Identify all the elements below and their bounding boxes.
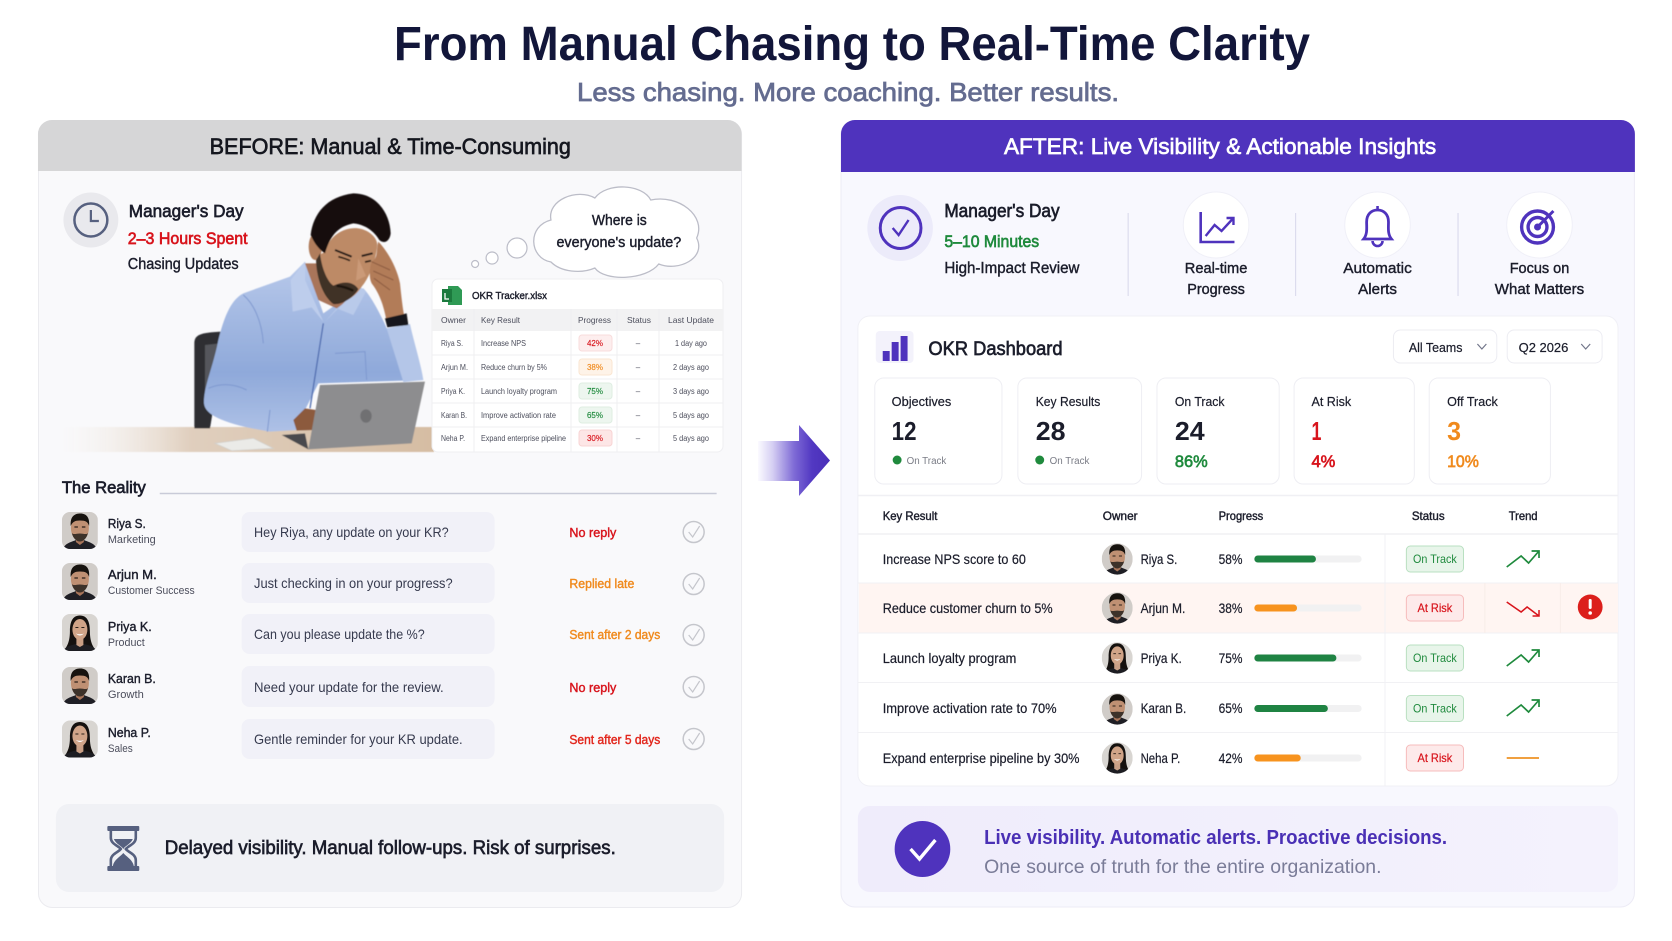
spreadsheet: okr tracker: 5 days ago: [673, 434, 709, 443]
spreadsheet: okr tracker: Karan B.: [441, 411, 467, 420]
kpi: on track: [1157, 378, 1279, 484]
row: pipeline: 42%: [1219, 751, 1242, 766]
manager's day before text: [128, 201, 248, 273]
spreadsheet: okr tracker: 2 days ago: [673, 363, 709, 372]
feature: focus on what matters: [1495, 192, 1584, 298]
kpi: off track: [1429, 378, 1550, 484]
feature: focus on what matters: What Matters: [1495, 281, 1584, 298]
feature: automatic alerts: [1343, 192, 1412, 298]
row: NPS: 58%: [1219, 552, 1242, 567]
spreadsheet: okr tracker: Arjun M.: [441, 363, 468, 372]
kpi: objectives: On Track: [907, 456, 947, 467]
feature: real-time progress: Real-time: [1185, 260, 1247, 277]
row: NPS: Increase NPS score to 60: [883, 552, 1026, 567]
manager's day before text: Manager's Day: [129, 201, 244, 221]
kpi: at risk: 4%: [1311, 453, 1336, 471]
after callout: Live visibility. Automatic alerts. Proactive decisions.: [984, 827, 1447, 849]
after callout: One source of truth for the entire organization.: [984, 857, 1382, 878]
spreadsheet: okr tracker: Expand enterprise pipeline: [481, 434, 566, 443]
row: churn at risk: [883, 592, 1603, 624]
title: From Manual Chasing to Real-Time Clarity: [394, 18, 1310, 71]
icon: check clock: [867, 195, 933, 261]
manager head and hand: [309, 193, 408, 327]
icon: excel: [442, 286, 462, 305]
kpi: key results: [1018, 378, 1142, 484]
kpi: key results: 28: [1036, 418, 1066, 446]
filter: all teams: [1393, 330, 1497, 363]
row: activation: Karan B.: [1141, 701, 1186, 716]
spreadsheet: okr tracker: –: [636, 434, 641, 443]
row: churn at risk: At Risk: [1417, 603, 1453, 615]
kpi: objectives: [875, 378, 1002, 484]
reality row: Priya: Product: [108, 637, 145, 649]
row: NPS: Riya S.: [1141, 552, 1177, 567]
kpi: key results: On Track: [1050, 456, 1090, 467]
panel: after: [841, 120, 1635, 907]
reality row: Riya: No reply: [569, 526, 617, 540]
row: activation: 65%: [1219, 701, 1242, 716]
row: churn at risk: 38%: [1219, 601, 1242, 616]
row: loyalty: Priya K.: [1141, 651, 1182, 666]
table header: Owner: [1103, 511, 1138, 523]
kpi: objectives: 12: [892, 418, 917, 446]
kpi: at risk: At Risk: [1311, 394, 1352, 409]
row: pipeline: At Risk: [1417, 753, 1453, 765]
kpi: on track: 86%: [1175, 453, 1208, 471]
spreadsheet: okr tracker: Increase NPS: [481, 339, 526, 348]
row: loyalty: 75%: [1219, 651, 1242, 666]
reality row: Arjun: Customer Success: [108, 585, 195, 597]
reality row: Karan: Karan B.: [108, 671, 156, 686]
reality row: Priya: Priya K.: [108, 619, 152, 634]
feature: real-time progress: Progress: [1187, 281, 1245, 298]
okr dashboard card: [858, 316, 1618, 786]
reality row: Karan: [62, 666, 704, 707]
thought bubble: Where is: [592, 213, 647, 229]
spreadsheet: okr tracker: –: [636, 411, 641, 420]
spreadsheet: okr tracker: –: [636, 339, 641, 348]
before callout: [56, 804, 724, 892]
illustration: stressed manager at laptop: [58, 193, 434, 452]
kpi: on track: On Track: [1175, 394, 1225, 409]
spreadsheet: okr tracker: 5 days ago: [673, 411, 709, 420]
reality row: Neha: Neha P.: [108, 725, 151, 740]
reality row: Neha: Sales: [108, 743, 133, 755]
panel: before: [38, 120, 742, 908]
table header: Progress: [1219, 511, 1264, 523]
reality row: Priya: Can you please update the %?: [254, 627, 425, 642]
feature: focus on what matters: Focus on: [1510, 260, 1569, 277]
manager's day before text: Chasing Updates: [128, 256, 239, 273]
thought bubble: [472, 187, 699, 277]
spreadsheet: okr tracker: 42%: [587, 338, 603, 348]
icon: check badge: [895, 821, 950, 877]
row: pipeline: Neha P.: [1141, 751, 1180, 766]
filter: quarter: Q2 2026: [1519, 340, 1568, 355]
after heading: AFTER: Live Visibility & Actionable Insights: [1004, 134, 1436, 159]
manager's day before text: 2–3 Hours Spent: [128, 229, 248, 248]
spreadsheet: okr tracker: OKR Tracker.xlsx: [472, 291, 548, 302]
reality row: Arjun: [62, 563, 704, 603]
kpi: off track: Off Track: [1447, 394, 1498, 409]
reality row: Karan: No reply: [569, 681, 617, 695]
reality row: Riya: [62, 512, 704, 552]
dashboard heading: OKR Dashboard: [928, 338, 1063, 360]
spreadsheet: okr tracker: –: [636, 387, 641, 396]
spreadsheet: okr tracker: Owner: [441, 315, 466, 325]
feature: automatic alerts: Automatic: [1343, 260, 1412, 277]
filter: quarter: [1507, 330, 1602, 363]
row: activation: Improve activation rate to 70%: [883, 701, 1057, 716]
kpi: at risk: [1294, 378, 1414, 484]
spreadsheet: okr tracker: Key Result: [481, 315, 521, 325]
icon: alert: [1578, 594, 1603, 620]
spreadsheet: okr tracker: 38%: [587, 362, 603, 372]
spreadsheet: okr tracker: Improve activation rate: [481, 411, 557, 420]
reality row: Neha: [62, 719, 704, 759]
after callout: [858, 806, 1618, 892]
kpi: at risk: 1: [1311, 418, 1321, 446]
row: pipeline: Expand enterprise pipeline by 30%: [883, 751, 1080, 766]
spreadsheet: okr tracker: Riya S.: [441, 339, 463, 348]
manager's day after text: Manager's Day: [944, 201, 1060, 221]
spreadsheet: okr tracker: 3 days ago: [673, 387, 709, 396]
row: NPS: On Track: [1413, 554, 1457, 566]
row: loyalty: [883, 642, 1539, 674]
row: NPS: [883, 543, 1539, 575]
spreadsheet: okr tracker: 1 day ago: [675, 339, 708, 348]
spreadsheet: okr tracker: [432, 279, 723, 452]
spreadsheet: okr tracker: Launch loyalty program: [481, 387, 557, 396]
row: churn at risk: Arjun M.: [1141, 601, 1185, 616]
thought bubble: everyone's update?: [556, 235, 681, 251]
reality row: Karan: Growth: [108, 689, 144, 701]
kpi: on track: 24: [1175, 418, 1205, 446]
reality row: Arjun: Just checking in on your progress?: [254, 576, 453, 591]
kpi: off track: 10%: [1447, 453, 1479, 471]
reality row: Riya: Hey Riya, any update on your KR?: [254, 525, 449, 540]
spreadsheet: okr tracker: Status: [627, 315, 651, 325]
spreadsheet: okr tracker: Priya K.: [441, 387, 465, 396]
row: pipeline: [883, 742, 1539, 774]
reality row: Arjun: Replied late: [569, 577, 634, 591]
before header bar: [38, 120, 742, 171]
icon: bars: [876, 331, 914, 363]
icon: clock: [63, 192, 118, 248]
arrow: [758, 425, 830, 496]
reality row: Riya: Riya S.: [108, 516, 146, 531]
manager's day after text: 5–10 Minutes: [944, 232, 1039, 251]
key results table: [858, 496, 1618, 786]
spreadsheet: okr tracker: Progress: [578, 315, 611, 325]
reality row: Arjun: Arjun M.: [108, 567, 157, 582]
reality row: Neha: Gentle reminder for your KR update.: [254, 732, 463, 747]
table header: Key Result: [883, 511, 938, 523]
spreadsheet: okr tracker: Reduce churn by 5%: [481, 363, 547, 372]
filter: all teams: All Teams: [1409, 340, 1463, 355]
spreadsheet: okr tracker: 75%: [587, 386, 603, 396]
table header: Status: [1412, 511, 1445, 523]
manager's day after text: [944, 201, 1080, 277]
spreadsheet: okr tracker: 30%: [587, 433, 603, 443]
spreadsheet: okr tracker: Last Update: [668, 315, 714, 325]
row: activation: [883, 693, 1539, 725]
spreadsheet: okr tracker: Neha P.: [441, 434, 465, 443]
reality row: Riya: Marketing: [108, 534, 156, 546]
before heading: BEFORE: Manual & Time-Consuming: [210, 134, 571, 159]
manager's day after text: High-Impact Review: [944, 260, 1080, 277]
row: activation: On Track: [1413, 703, 1457, 716]
reality row: Priya: Sent after 2 days: [569, 628, 660, 642]
subtitle: Less chasing. More coaching. Better results.: [577, 77, 1119, 107]
kpi: key results: Key Results: [1036, 394, 1100, 409]
icon: hourglass: [107, 826, 139, 871]
feature: real-time progress: [1183, 192, 1249, 298]
row: churn at risk: Reduce customer churn to 5%: [883, 601, 1053, 616]
reality row: Karan: Need your update for the review.: [254, 680, 444, 695]
the reality heading: The Reality: [62, 478, 146, 497]
row: loyalty: Launch loyalty program: [883, 651, 1016, 666]
spreadsheet: okr tracker: 65%: [587, 410, 603, 420]
row: loyalty: On Track: [1413, 653, 1457, 665]
before callout: Delayed visibility. Manual follow-ups. Risk of surprises.: [165, 837, 616, 859]
kpi: off track: 3: [1447, 418, 1461, 446]
reality row: Neha: Sent after 5 days: [569, 733, 660, 747]
reality row: Priya: [62, 614, 704, 654]
after header bar: [841, 120, 1635, 172]
feature: automatic alerts: Alerts: [1358, 281, 1397, 298]
spreadsheet: okr tracker: –: [636, 363, 641, 372]
table header: Trend: [1509, 511, 1538, 523]
table header: [883, 511, 1538, 523]
kpi: objectives: Objectives: [892, 394, 951, 409]
